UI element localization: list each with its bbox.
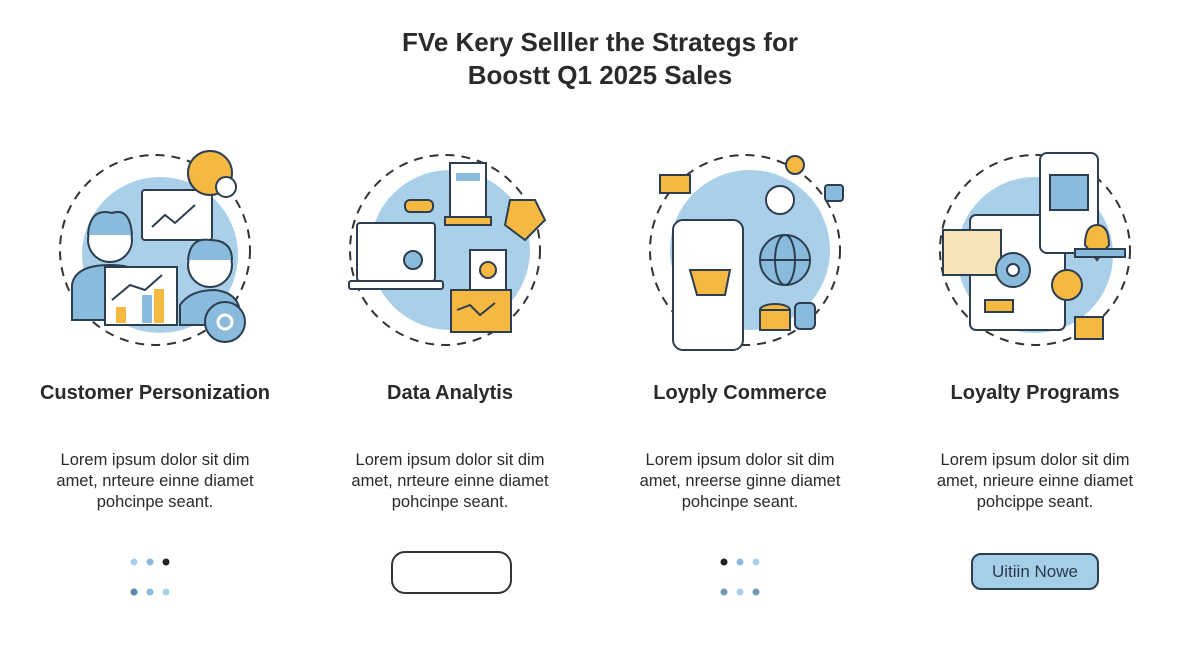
dots indicator 1	[130, 558, 170, 596]
text: data analytics: Lorem ipsum dolor sit dim	[356, 451, 544, 469]
text: loyply commerce: amet, nreerse ginne diamet	[640, 472, 840, 490]
text: data analytics: amet, nrteure einne diamet	[351, 472, 549, 490]
title	[402, 27, 798, 90]
text: customer personalization: amet, nrteure einne diamet	[56, 472, 254, 490]
dots indicator 2	[720, 558, 760, 596]
heading: data analytics: Data Analytis	[387, 382, 513, 404]
text: loyply commerce	[640, 451, 840, 511]
text: customer personalization	[56, 451, 254, 511]
icon: loyalty programs	[939, 152, 1131, 346]
text: loyalty programs	[937, 451, 1133, 511]
text: customer personalization: Lorem ipsum dolor sit dim	[61, 451, 249, 469]
title: Boostt Q1 2025 Sales	[468, 60, 732, 90]
heading: customer personalization: Customer Personization	[40, 382, 270, 404]
button: Uitiin Nowe: Uitiin Nowe	[992, 562, 1078, 581]
text: loyalty programs: Lorem ipsum dolor sit dim	[941, 451, 1129, 469]
button: Uitiin Nowe	[971, 553, 1099, 590]
text: loyalty programs: amet, nrieure einne diamet	[937, 472, 1133, 490]
text: loyply commerce: pohcinpe seant.	[682, 493, 798, 511]
text: data analytics: pohcinpe seant.	[392, 493, 508, 511]
text: customer personalization: pohcinpe seant.	[97, 493, 213, 511]
heading: loyply commerce: Loyply Commerce	[653, 382, 827, 404]
icon: loyply commerce	[649, 154, 844, 351]
heading: loyalty programs: Loyalty Programs	[951, 382, 1119, 404]
text: loyply commerce: Lorem ipsum dolor sit dim	[646, 451, 834, 469]
text: data analytics	[351, 451, 549, 511]
button outline	[391, 551, 512, 594]
icon: customer personalization	[59, 150, 251, 346]
text: loyalty programs: pohcippe seant.	[977, 493, 1093, 511]
title: FVe Kery Selller the Strategs for	[402, 27, 798, 57]
icon: data analytics	[348, 154, 546, 346]
